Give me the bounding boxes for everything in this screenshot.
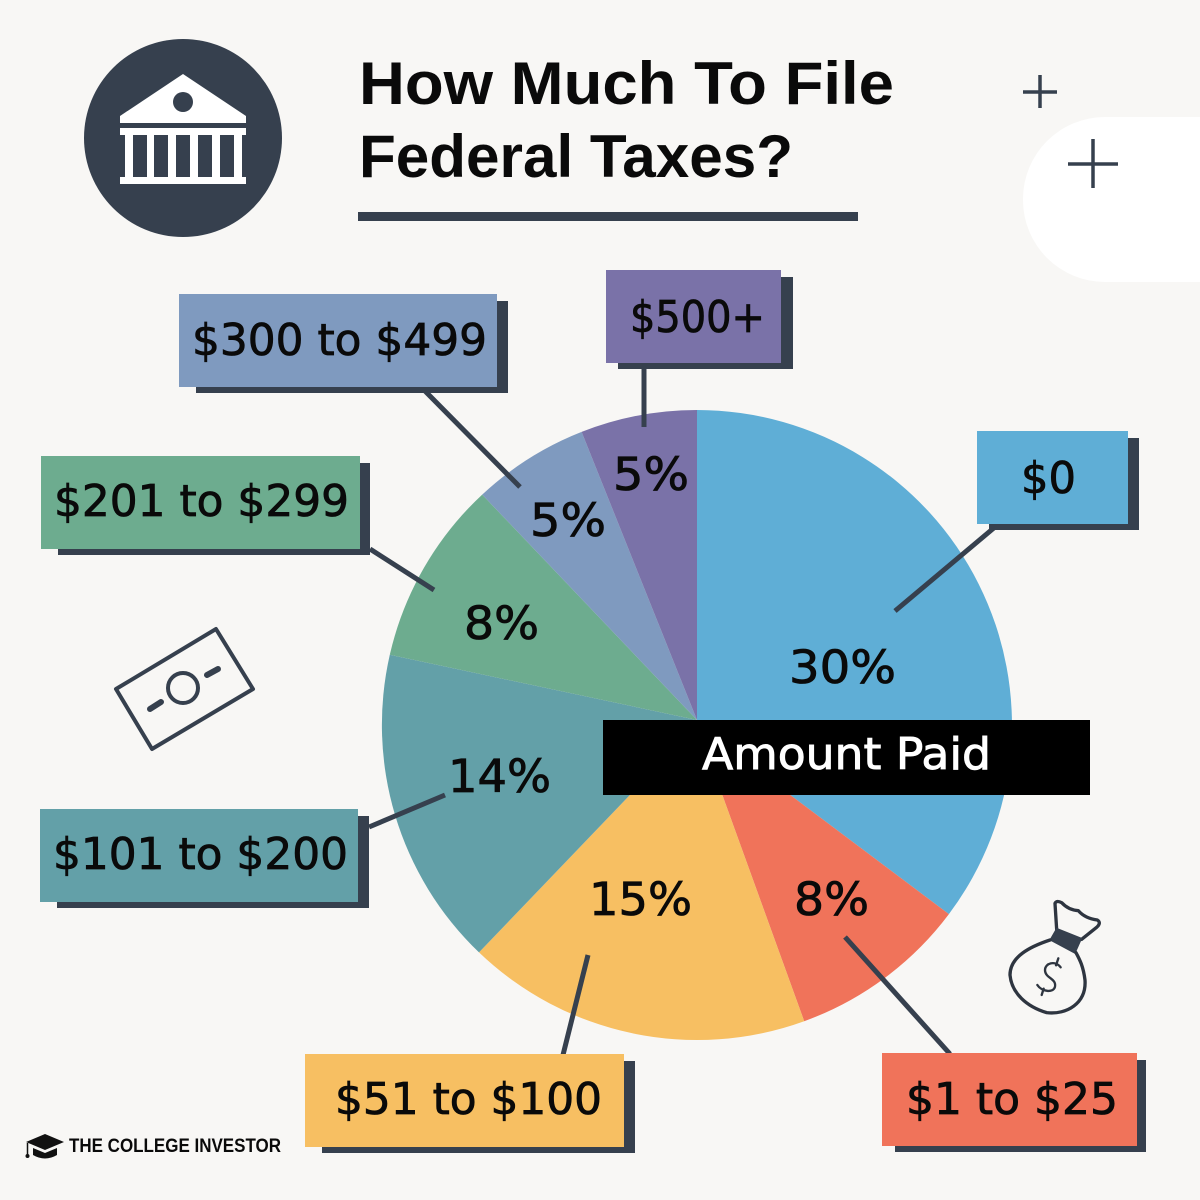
icon: bank building bbox=[84, 39, 282, 237]
logo: the college investor bbox=[26, 1134, 281, 1158]
icon: dollar bill bbox=[116, 629, 253, 749]
label: $300 to $499: $300 to $499 bbox=[192, 315, 487, 366]
label: $101 to $200 bbox=[40, 809, 369, 908]
label: $1 to $25: $1 to $25 bbox=[906, 1074, 1118, 1125]
percent labels: 15% bbox=[589, 873, 692, 926]
amount paid banner: Amount Paid bbox=[702, 729, 991, 780]
percent labels: 8% bbox=[794, 873, 869, 926]
logo: the college investor: THE COLLEGE INVESTOR bbox=[69, 1136, 281, 1157]
percent labels bbox=[448, 448, 896, 926]
title bbox=[359, 50, 894, 190]
label: $300 to $499 bbox=[179, 294, 508, 393]
pie chart bbox=[382, 410, 1012, 1040]
percent labels: 30% bbox=[789, 641, 896, 694]
label: $0 bbox=[977, 431, 1139, 530]
percent labels: 5% bbox=[530, 494, 606, 547]
percent labels: 8% bbox=[464, 597, 539, 650]
label: $201 to $299 bbox=[41, 456, 370, 555]
label: $51 to $100: $51 to $100 bbox=[335, 1074, 602, 1125]
title: Federal Taxes? bbox=[359, 123, 793, 190]
title: How Much To File bbox=[359, 50, 894, 117]
label: $1 to $25 bbox=[882, 1053, 1146, 1152]
label: $500+ bbox=[606, 270, 793, 369]
label: $101 to $200: $101 to $200 bbox=[53, 829, 348, 880]
label: $51 to $100 bbox=[305, 1054, 635, 1153]
amount paid banner bbox=[603, 720, 1090, 795]
label: $0: $0 bbox=[1021, 453, 1076, 504]
icon: large plus bbox=[1068, 139, 1118, 188]
label: $201 to $299: $201 to $299 bbox=[54, 476, 349, 527]
icon: small plus bbox=[1023, 75, 1057, 108]
percent labels: 14% bbox=[448, 750, 551, 803]
leader lines bbox=[369, 369, 995, 1055]
label: $500+: $500+ bbox=[630, 292, 765, 343]
percent labels: 5% bbox=[613, 448, 689, 501]
icon: money bag bbox=[1010, 901, 1099, 1013]
